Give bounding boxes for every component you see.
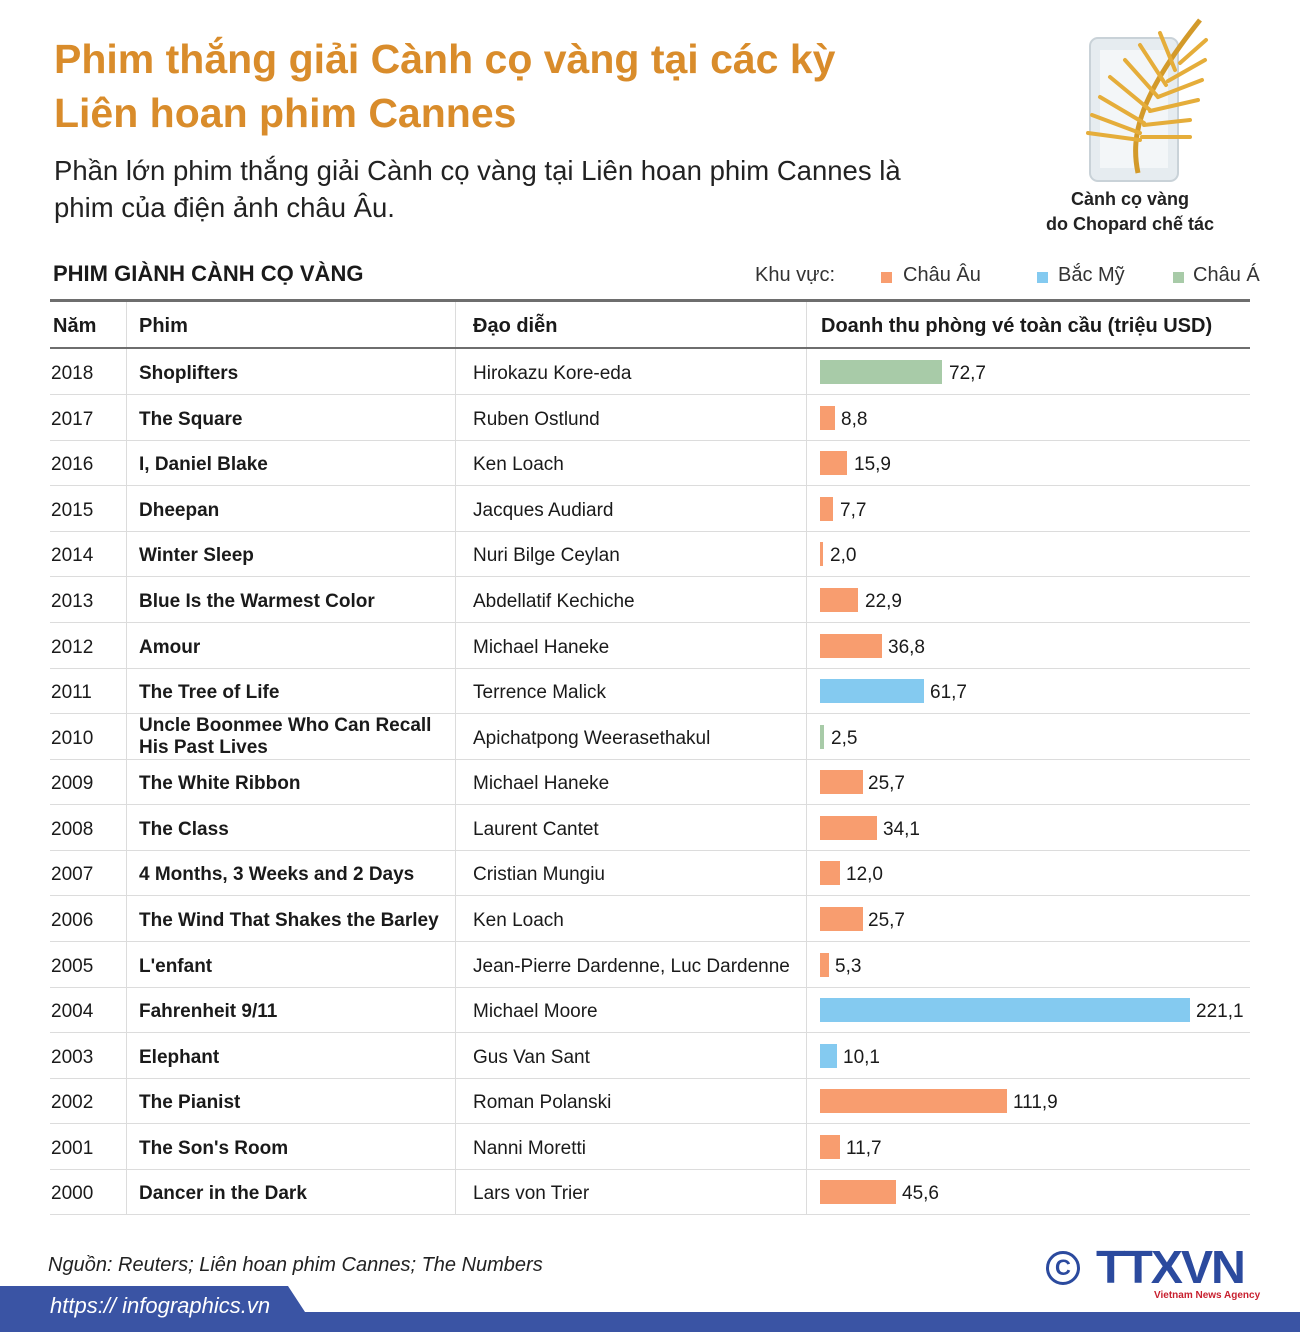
row 2001: 2001 — [51, 1138, 93, 1159]
row 2009: The White Ribbon — [139, 773, 300, 794]
row 2011: Terrence Malick — [473, 682, 606, 703]
row 2009: Michael Haneke — [473, 773, 609, 794]
source: Nguồn: Reuters; Liên hoan phim Cannes; The Numbers — [48, 1254, 543, 1276]
row 2000 — [50, 1169, 1250, 1215]
row 2004: Michael Moore — [473, 1001, 598, 1022]
row 2013: Abdellatif Kechiche — [473, 591, 635, 612]
legend: Bắc Mỹ — [1058, 264, 1125, 286]
row 2002: 111,9 — [1013, 1092, 1058, 1113]
row 2013: 2013 — [51, 591, 93, 612]
subtitle: phim của điện ảnh châu Âu. — [54, 192, 395, 223]
row 2012: Amour — [139, 637, 200, 658]
row 2014: Nuri Bilge Ceylan — [473, 545, 620, 566]
row 2014: 2014 — [51, 545, 93, 566]
row 2006 — [50, 896, 1250, 942]
legend: Châu Âu — [903, 264, 981, 286]
row 2002: The Pianist — [139, 1092, 240, 1113]
table header — [50, 302, 1250, 349]
row 2005 — [50, 942, 1250, 988]
row 2002: Roman Polanski — [473, 1092, 611, 1113]
row 2008: Laurent Cantet — [473, 819, 599, 840]
row 2010: His Past Lives — [139, 737, 268, 758]
row 2003: Gus Van Sant — [473, 1047, 590, 1068]
row 2000: 2000 — [51, 1183, 93, 1204]
row 2017: Ruben Ostlund — [473, 409, 600, 430]
row 2017: 8,8 — [841, 409, 867, 430]
subtitle: Phần lớn phim thắng giải Cành cọ vàng tại Liên hoan phim Cannes là — [54, 155, 901, 186]
logo: TTXVN: TTXVN — [1096, 1241, 1244, 1293]
row 2016: I, Daniel Blake — [139, 454, 268, 475]
row 2002 — [50, 1078, 1250, 1124]
row 2008: 2008 — [51, 819, 93, 840]
row 2000: 45,6 — [902, 1183, 939, 1204]
row 2010: Uncle Boonmee Who Can Recall — [139, 715, 431, 736]
row 2004: 2004 — [51, 1001, 93, 1022]
section heading: PHIM GIÀNH CÀNH CỌ VÀNG — [53, 261, 363, 286]
row 2018: 72,7 — [949, 363, 986, 384]
row 2011: The Tree of Life — [139, 682, 279, 703]
row 2006: 2006 — [51, 910, 93, 931]
subtitle — [54, 155, 901, 223]
footer band — [0, 1286, 1300, 1332]
row 2003: 2003 — [51, 1047, 93, 1068]
row 2009: 2009 — [51, 773, 93, 794]
caption: palme — [1046, 189, 1214, 234]
row 2018: 2018 — [51, 363, 93, 384]
row 2015: 7,7 — [840, 500, 866, 521]
logo: TTXVN: Vietnam News Agency — [1154, 1290, 1260, 1301]
row 2012: 2012 — [51, 637, 93, 658]
row 2002: 2002 — [51, 1092, 93, 1113]
row 2008: 34,1 — [883, 819, 920, 840]
row 2003: 10,1 — [843, 1047, 880, 1068]
row 2016: Ken Loach — [473, 454, 564, 475]
row 2001 — [50, 1124, 1250, 1170]
row 2013: Blue Is the Warmest Color — [139, 591, 375, 612]
row 2009: 25,7 — [868, 773, 905, 794]
row 2014: 2,0 — [830, 545, 856, 566]
title: Phim thắng giải Cành cọ vàng tại các kỳ — [54, 36, 835, 82]
row 2005: L'enfant — [139, 956, 212, 977]
table header: Đạo diễn — [473, 315, 557, 337]
row 2011 — [50, 668, 1250, 714]
row 2001: Nanni Moretti — [473, 1138, 586, 1159]
row 2001: The Son's Room — [139, 1138, 288, 1159]
legend: Khu vực: — [755, 264, 835, 286]
row 2013 — [50, 577, 1250, 623]
row 2007: 2007 — [51, 864, 93, 885]
table header: Doanh thu phòng vé toàn cầu (triệu USD) — [821, 315, 1212, 337]
title: Liên hoan phim Cannes — [54, 90, 516, 136]
row 2014 — [50, 531, 1250, 577]
row 2010: 2010 — [51, 728, 93, 749]
row 2001: 11,7 — [846, 1138, 882, 1159]
row 2016: 15,9 — [854, 454, 891, 475]
legend: Châu Á — [1193, 264, 1260, 286]
row 2012 — [50, 623, 1250, 669]
row 2016 — [50, 440, 1250, 486]
row 2007: 12,0 — [846, 864, 883, 885]
row 2018 — [50, 349, 1250, 395]
row 2015 — [50, 486, 1250, 532]
row 2015: Jacques Audiard — [473, 500, 614, 521]
row 2007: 4 Months, 3 Weeks and 2 Days — [139, 864, 414, 885]
row 2010 — [50, 714, 1250, 760]
row 2004 — [50, 987, 1250, 1033]
row 2007: Cristian Mungiu — [473, 864, 605, 885]
row 2009 — [50, 759, 1250, 805]
table header: Phim — [139, 315, 188, 337]
row 2012: 36,8 — [888, 637, 925, 658]
row 2008: The Class — [139, 819, 229, 840]
row 2013: 22,9 — [865, 591, 902, 612]
row 2012: Michael Haneke — [473, 637, 609, 658]
row 2004: 221,1 — [1196, 1001, 1244, 1022]
row 2006: The Wind That Shakes the Barley — [139, 910, 439, 931]
row 2018: Shoplifters — [139, 363, 238, 384]
row 2006: 25,7 — [868, 910, 905, 931]
row 2005: Jean-Pierre Dardenne, Luc Dardenne — [473, 956, 790, 977]
row 2005: 5,3 — [835, 956, 861, 977]
caption: palme: do Chopard chế tác — [1046, 214, 1214, 234]
row 2000: Dancer in the Dark — [139, 1183, 307, 1204]
row 2016: 2016 — [51, 454, 93, 475]
row 2008 — [50, 805, 1250, 851]
title — [54, 36, 836, 136]
table header: Năm — [53, 315, 96, 337]
row 2017: The Square — [139, 409, 242, 430]
row 2015: 2015 — [51, 500, 93, 521]
row 2003 — [50, 1033, 1250, 1079]
row 2017 — [50, 395, 1250, 441]
row 2000: Lars von Trier — [473, 1183, 589, 1204]
row 2005: 2005 — [51, 956, 93, 977]
row 2003: Elephant — [139, 1047, 219, 1068]
logo: TTXVN — [1046, 1241, 1260, 1301]
caption: palme: Cành cọ vàng — [1071, 189, 1189, 209]
footer band: https:// infographics.vn — [50, 1293, 270, 1318]
row 2015: Dheepan — [139, 500, 219, 521]
icon: palme d'or — [1086, 18, 1208, 182]
row 2011: 61,7 — [930, 682, 967, 703]
row 2014: Winter Sleep — [139, 545, 254, 566]
row 2004: Fahrenheit 9/11 — [139, 1001, 277, 1022]
legend — [755, 263, 1260, 286]
row 2017: 2017 — [51, 409, 93, 430]
row 2010: 2,5 — [831, 728, 857, 749]
row 2011: 2011 — [51, 682, 92, 703]
row 2010: Apichatpong Weerasethakul — [473, 728, 710, 749]
logo: TTXVN: C — [1055, 1255, 1071, 1280]
row 2007 — [50, 850, 1250, 896]
row 2018: Hirokazu Kore-eda — [473, 363, 631, 384]
row 2006: Ken Loach — [473, 910, 564, 931]
